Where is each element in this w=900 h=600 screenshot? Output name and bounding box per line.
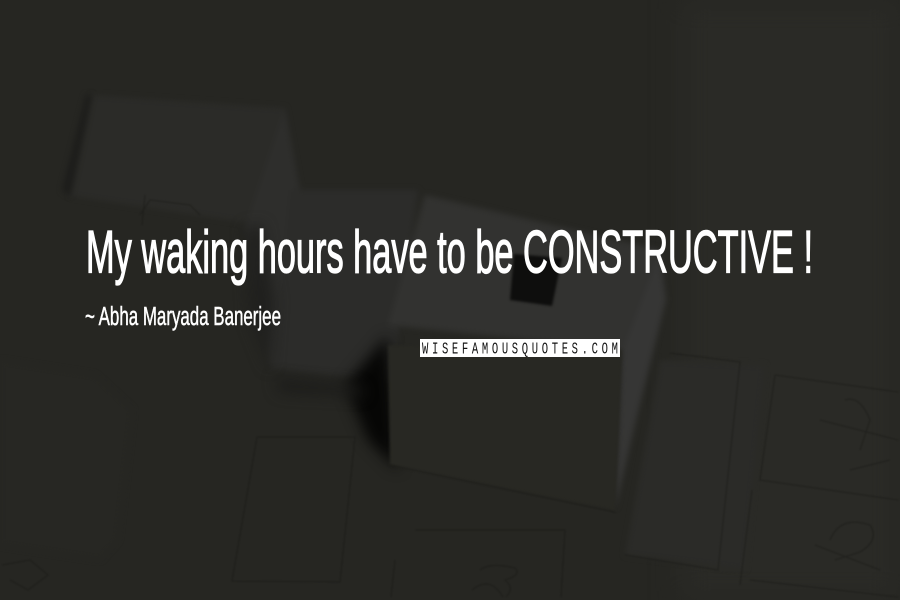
watermark badge: WISEFAMOUSQUOTES.COM xyxy=(422,340,618,360)
pencil markings on paper xyxy=(2,195,898,597)
author attribution: ~ Abha Maryada Banerjee xyxy=(85,303,281,331)
